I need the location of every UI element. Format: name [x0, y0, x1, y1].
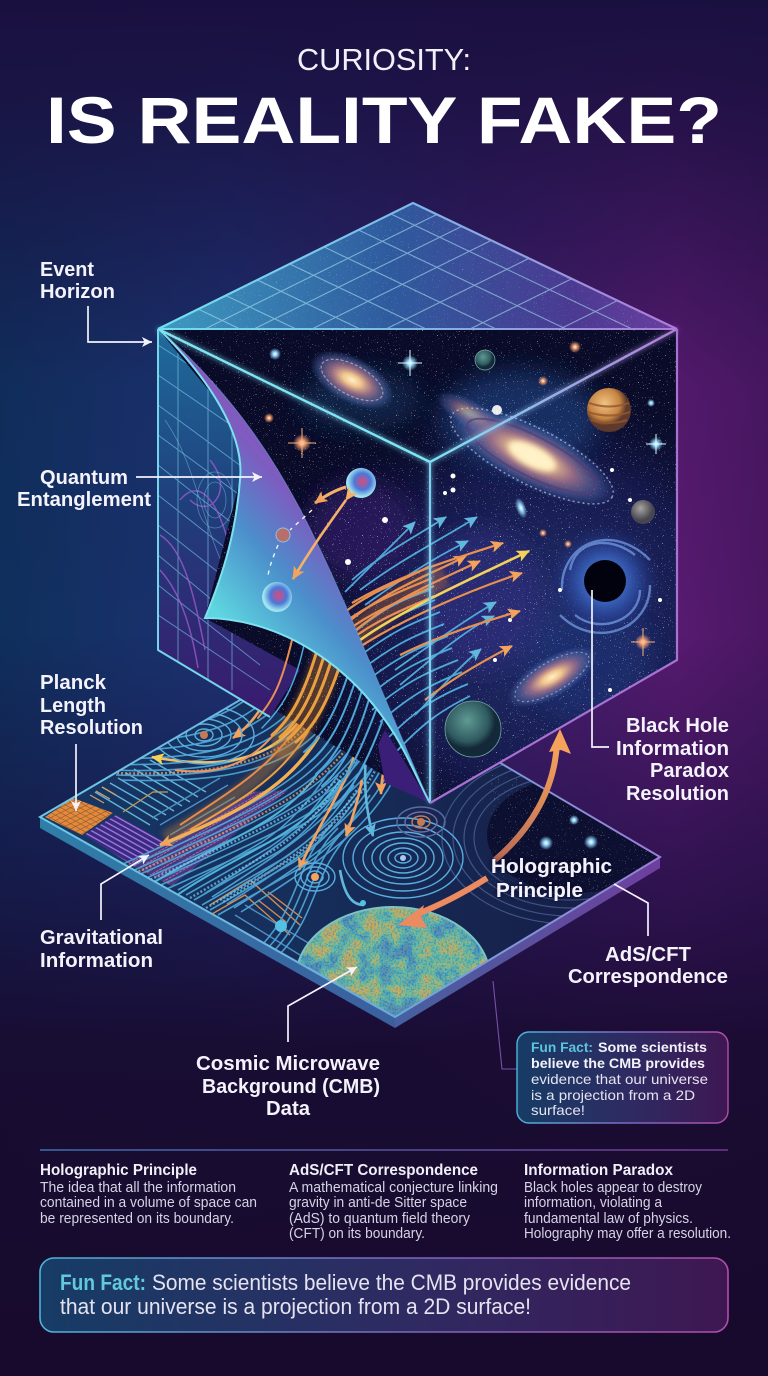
orange and yellow flow arrows on floor	[151, 710, 386, 906]
planet earthlike	[445, 701, 501, 757]
callout: small fun fact with leader: Some scientists	[598, 1039, 707, 1055]
label: cosmic microwave background: Data	[266, 1098, 311, 1120]
title: curiosity line: CURIOSITY:	[297, 42, 471, 77]
column: ads/cft correspondence: AdS/CFT Correspondence	[289, 1162, 478, 1179]
lower galaxy	[510, 648, 594, 706]
column: information paradox: Information Paradox	[524, 1162, 673, 1179]
label: gravitational information: Information	[40, 950, 153, 972]
circuit pattern near corner	[95, 760, 320, 955]
title	[46, 42, 722, 157]
pink data band	[128, 790, 288, 886]
label: holographic principle	[491, 856, 612, 902]
title: main heading: IS REALITY FAKE?	[46, 83, 722, 157]
label: cosmic microwave background: Cosmic Microwave	[196, 1053, 380, 1075]
label: quantum entanglement: Quantum	[40, 467, 128, 489]
particle lower	[262, 582, 292, 612]
label: event horizon: Horizon	[40, 281, 115, 303]
callout: small fun fact with leader	[493, 981, 728, 1123]
callout: bottom fun fact banner: Some scientists believe the CMB provides evidence	[152, 1270, 631, 1295]
cube	[154, 202, 680, 809]
swirl nodes	[200, 731, 425, 932]
label: cosmic microwave background	[196, 967, 380, 1120]
cube: top holographic face	[162, 204, 672, 328]
callout: bottom fun fact banner: that our universe is a projection from a 2D surface!	[60, 1294, 531, 1319]
column: ads/cft correspondence: (CFT) on its boundary.	[289, 1226, 425, 1242]
label: event horizon	[40, 259, 152, 342]
galaxy upper left	[311, 351, 392, 408]
circuit near grid	[90, 787, 168, 812]
label: quantum entanglement	[17, 467, 262, 511]
large galaxy	[450, 407, 614, 505]
column: ads/cft correspondence: (AdS) to quantum field theory	[289, 1211, 471, 1227]
arrow head up	[549, 729, 571, 754]
label: planck length resolution: Length	[40, 695, 106, 717]
particle upper	[346, 468, 376, 498]
orange band glow in space	[350, 575, 445, 640]
label: holographic principle: Principle	[496, 880, 583, 902]
dashed trajectory	[268, 510, 312, 578]
label: gravitational information	[40, 855, 163, 972]
column: information paradox: fundamental law of physics.	[524, 1211, 693, 1227]
dashed texture lines	[117, 728, 376, 909]
black hole swirl	[549, 525, 661, 637]
label: ads/cft correspondence: AdS/CFT	[605, 944, 691, 966]
planet jupiter	[587, 388, 631, 432]
column: ads/cft correspondence: A mathematical conjecture linking	[289, 1180, 498, 1196]
label: black hole information paradox resolution	[592, 590, 729, 805]
column: information paradox: information, violating a	[524, 1195, 663, 1211]
floor side edges	[40, 817, 660, 1028]
planet teal small	[475, 350, 495, 370]
bright stars	[264, 341, 666, 692]
blue and orange stream lines	[345, 517, 529, 752]
orange band glow	[160, 722, 310, 844]
column: holographic principle: contained in a volume of space can	[40, 1195, 257, 1211]
particle small	[276, 528, 290, 542]
column: information paradox	[524, 1162, 731, 1242]
cube: space interior	[158, 329, 678, 809]
column: holographic principle	[40, 1162, 257, 1227]
entangled particles	[262, 468, 376, 612]
label: planck length resolution	[40, 672, 143, 811]
cube: left grid panel	[158, 329, 300, 717]
column: holographic principle: Holographic Principle	[40, 1162, 197, 1179]
orange arrows	[315, 487, 346, 503]
concentric swirls	[154, 706, 463, 898]
label: ads/cft correspondence: Correspondence	[568, 966, 728, 988]
planet grey	[631, 500, 655, 524]
divider	[40, 1149, 728, 1151]
CMB map	[298, 906, 488, 1016]
callout: bottom fun fact banner	[40, 1258, 728, 1332]
callout: small fun fact with leader: is a projection from a 2D	[531, 1087, 695, 1103]
column: holographic principle: be represented on its boundary.	[40, 1211, 234, 1227]
label: cosmic microwave background: Background (CMB)	[202, 1076, 380, 1098]
callout: small fun fact with leader: evidence that our universe	[531, 1071, 708, 1087]
blue flow lines	[116, 702, 391, 952]
callout: bottom fun fact banner: Fun Fact:	[60, 1270, 146, 1295]
big arrow: holographic projection up to cube	[495, 742, 557, 860]
callout: small fun fact with leader: Fun Fact:	[531, 1039, 593, 1055]
column: information paradox: Black holes appear to destroy	[524, 1180, 703, 1196]
label: planck length resolution: Resolution	[40, 717, 143, 739]
column: ads/cft correspondence	[289, 1162, 498, 1242]
star patch	[441, 764, 656, 924]
label: quantum entanglement: Entanglement	[17, 489, 151, 511]
big arrow: to CMB	[398, 878, 487, 928]
label: black hole information paradox resolution: Information	[616, 738, 729, 760]
galaxy small smear	[438, 392, 497, 431]
cube: peeled hologram sheet	[160, 330, 430, 803]
label: holographic principle: Holographic	[491, 856, 612, 878]
purple hatch block	[84, 815, 165, 865]
label: black hole information paradox resolution: Black Hole	[626, 715, 729, 737]
nebula glows	[300, 370, 650, 720]
label: black hole information paradox resolution: Paradox	[650, 760, 729, 782]
callout: small fun fact with leader: surface!	[531, 1102, 585, 1118]
isometric floor: hologram boundary surface	[38, 700, 662, 1028]
planck grid	[45, 798, 113, 835]
cube: glowing edges	[158, 203, 677, 803]
column: holographic principle: The idea that all the information	[40, 1180, 236, 1196]
label: planck length resolution: Planck	[40, 672, 107, 694]
floor rim	[40, 655, 660, 1017]
column: information paradox: Holography may offer a resolution.	[524, 1226, 731, 1242]
cube: streams falling from sheet	[258, 640, 382, 808]
cube: purple sliver behind stream	[378, 730, 430, 803]
label: ads/cft correspondence	[568, 884, 728, 988]
label: gravitational information: Gravitational	[40, 927, 163, 949]
column: ads/cft correspondence: gravity in anti-de Sitter space	[289, 1195, 467, 1211]
callout: small fun fact with leader: believe the CMB provides	[531, 1055, 705, 1071]
floor surface with data streams	[42, 701, 658, 1016]
label: black hole information paradox resolution: Resolution	[626, 783, 729, 805]
label: event horizon: Event	[40, 259, 94, 281]
